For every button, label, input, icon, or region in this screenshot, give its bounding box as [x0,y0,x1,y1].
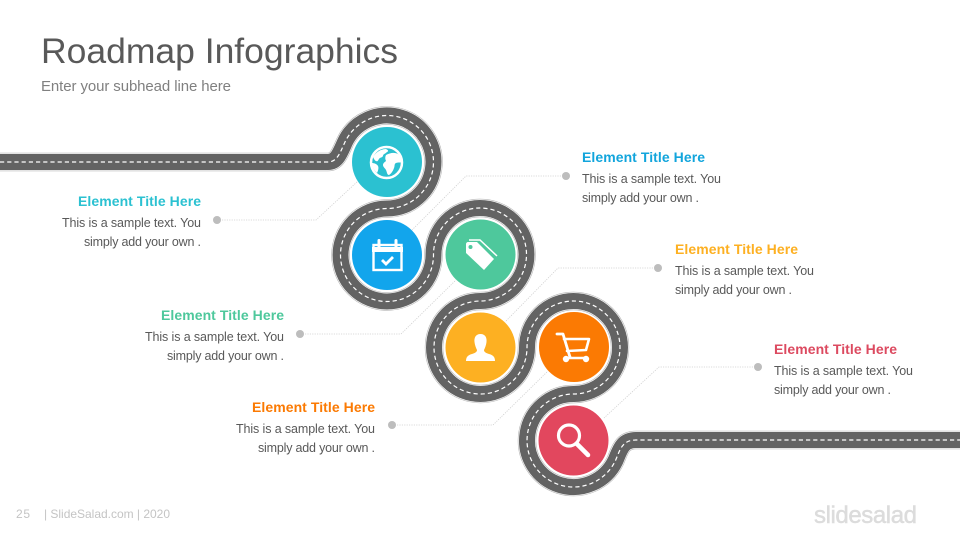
circle: yellow user [446,312,516,382]
circle: orange cart [539,312,609,382]
text block: green element [145,307,284,363]
text block: orange element: This is a sample text. You [236,422,375,436]
title: Roadmap Infographics [41,31,398,71]
icon: user [466,334,495,361]
text block: yellow element [675,241,814,297]
leader line: yellow [505,264,662,322]
text block: red element: This is a sample text. You [774,364,913,378]
text block: blue element: simply add your own . [582,191,699,205]
text block: orange element: simply add your own . [258,441,375,455]
text block: red element: Element Title Here [774,341,897,357]
text block: green element: simply add your own . [167,349,284,363]
circle: green tag [446,220,516,290]
text block: blue element [582,149,721,205]
text block: blue element: This is a sample text. You [582,172,721,186]
text block: red element [774,341,913,397]
text block: red element: simply add your own . [774,383,891,397]
road [0,116,960,487]
leader line: teal [213,181,358,224]
icon: tag [466,240,497,270]
text block: teal element: simply add your own . [84,235,201,249]
circle: teal globe [352,127,422,197]
text block: yellow element: simply add your own . [675,283,792,297]
text block: yellow element: This is a sample text. You [675,264,814,278]
text block: green element: This is a sample text. You [145,330,284,344]
circle: red search [538,406,608,476]
text block: orange element: Element Title Here [252,399,375,415]
subhead: Enter your subhead line here [41,78,231,95]
icon: globe [371,147,402,178]
leader line: orange [388,371,548,429]
footer: credit: | SlideSalad.com | 2020 [44,507,170,521]
text block: yellow element: Element Title Here [675,241,798,257]
circle: blue calendar [352,220,422,290]
leader line: red [604,363,762,418]
footer: logo wordmark: slidesalad [814,502,917,529]
text block: teal element: Element Title Here [78,193,201,209]
icon: cart [557,334,589,361]
footer: page number: 25 [16,507,30,521]
leader line: blue [412,172,570,230]
leader line: green [296,280,456,338]
text block: orange element [236,399,375,455]
text block: blue element: Element Title Here [582,149,705,165]
icon: calendar [372,240,403,270]
text block: teal element: This is a sample text. You [62,216,201,230]
icon: magnifier [558,425,588,455]
text block: green element: Element Title Here [161,307,284,323]
text block: teal element [62,193,201,249]
